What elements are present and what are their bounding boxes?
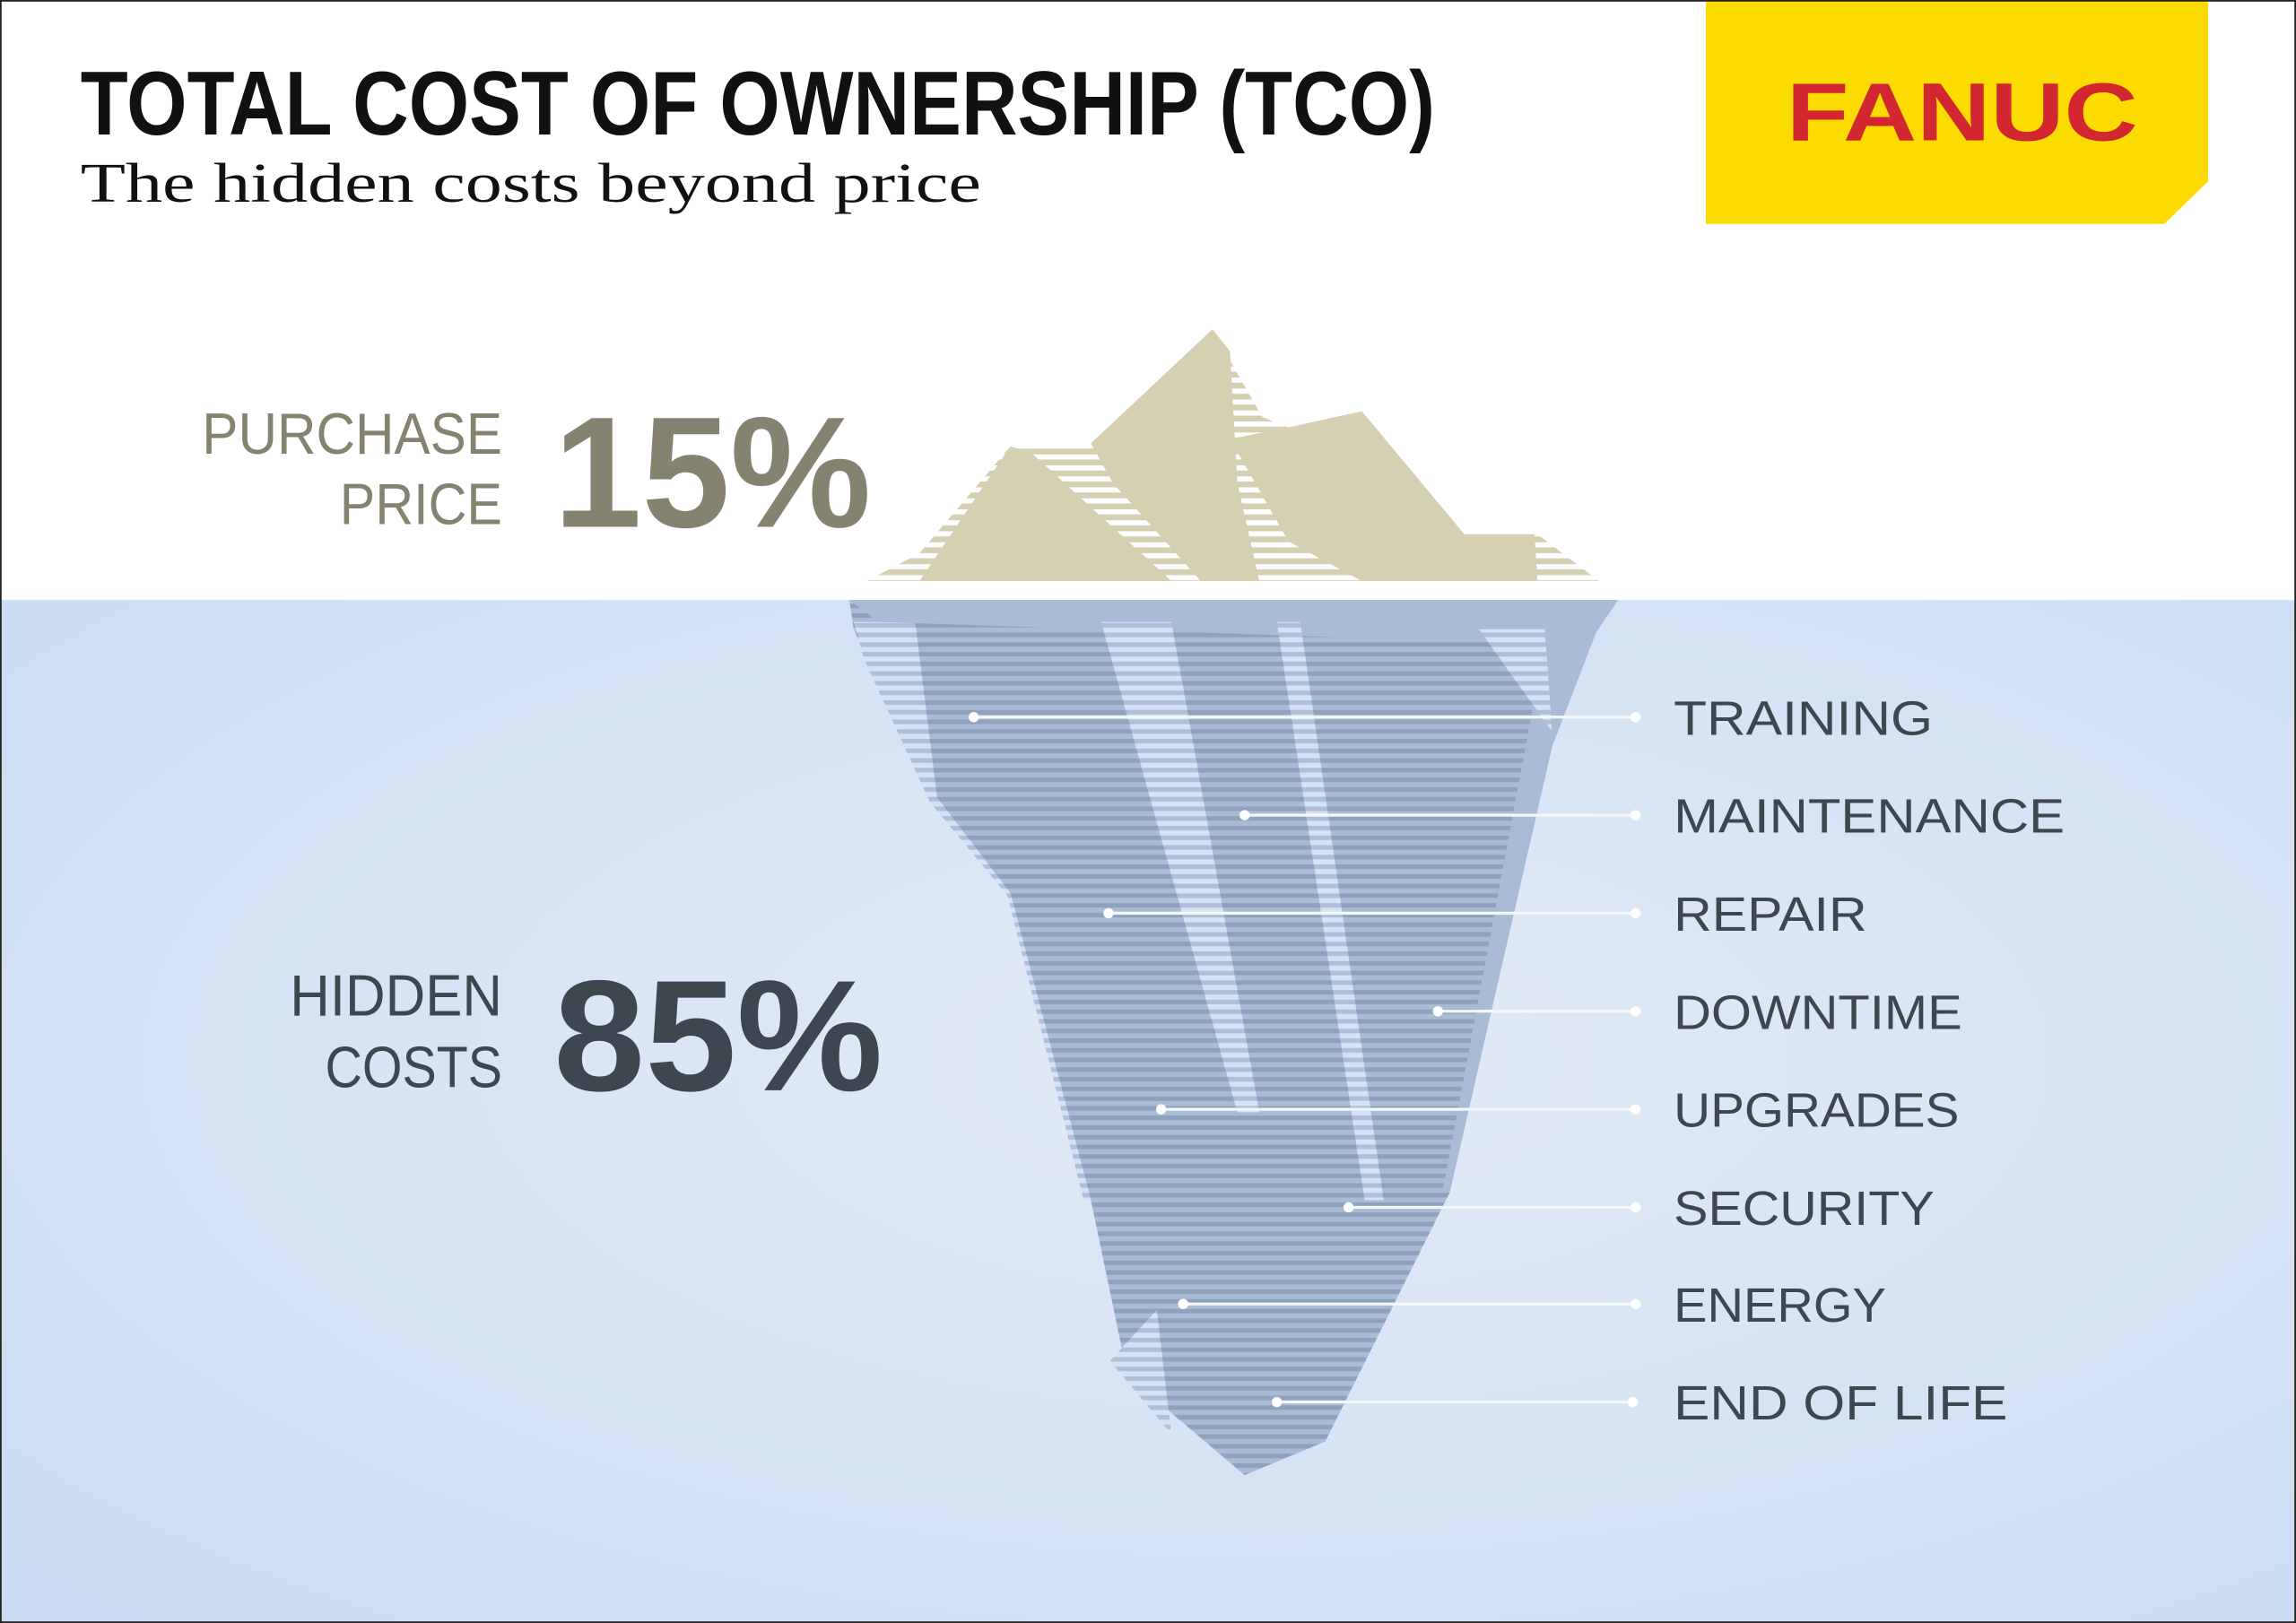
item: security bbox=[1344, 1182, 1935, 1236]
cost items list with leader lines bbox=[969, 691, 2065, 1430]
label: hidden costs bbox=[290, 948, 883, 1124]
item: repair: REPAIR bbox=[1674, 888, 1867, 942]
water background bbox=[0, 600, 2296, 1623]
item: repair bbox=[1103, 888, 1867, 942]
item: downtime bbox=[1433, 985, 1962, 1039]
label: purchase price bbox=[202, 385, 871, 561]
title: TOTAL COST OF OWNERSHIP (TCO) bbox=[81, 53, 1435, 154]
iceberg above water bbox=[867, 329, 1599, 581]
item: upgrades bbox=[1156, 1084, 1959, 1138]
item: downtime: DOWNTIME bbox=[1674, 985, 1962, 1039]
item: training bbox=[969, 691, 1933, 745]
item: training: TRAINING bbox=[1674, 691, 1933, 745]
item: end of life: END OF LIFE bbox=[1674, 1376, 2007, 1430]
item: energy: ENERGY bbox=[1674, 1279, 1886, 1332]
item: upgrades: UPGRADES bbox=[1674, 1084, 1959, 1138]
label: hidden costs: 85% bbox=[553, 948, 883, 1124]
item: maintenance bbox=[1239, 790, 2065, 844]
item: end of life bbox=[1272, 1376, 2007, 1430]
label: purchase price: PRICE bbox=[340, 471, 502, 536]
item: security: SECURITY bbox=[1674, 1182, 1935, 1236]
item: energy bbox=[1178, 1279, 1886, 1332]
label: purchase price: 15% bbox=[553, 385, 871, 561]
item: maintenance: MAINTENANCE bbox=[1674, 790, 2065, 844]
logo: FANUC bbox=[1706, 0, 2208, 224]
label: hidden costs: COSTS bbox=[325, 1035, 502, 1100]
label: purchase price: PURCHASE bbox=[202, 401, 502, 466]
iceberg below water bbox=[849, 600, 1618, 1475]
label: hidden costs: HIDDEN bbox=[290, 963, 502, 1028]
logo: FANUC: FANUC bbox=[1787, 67, 2138, 159]
subtitle: The hidden costs beyond price bbox=[81, 153, 981, 214]
